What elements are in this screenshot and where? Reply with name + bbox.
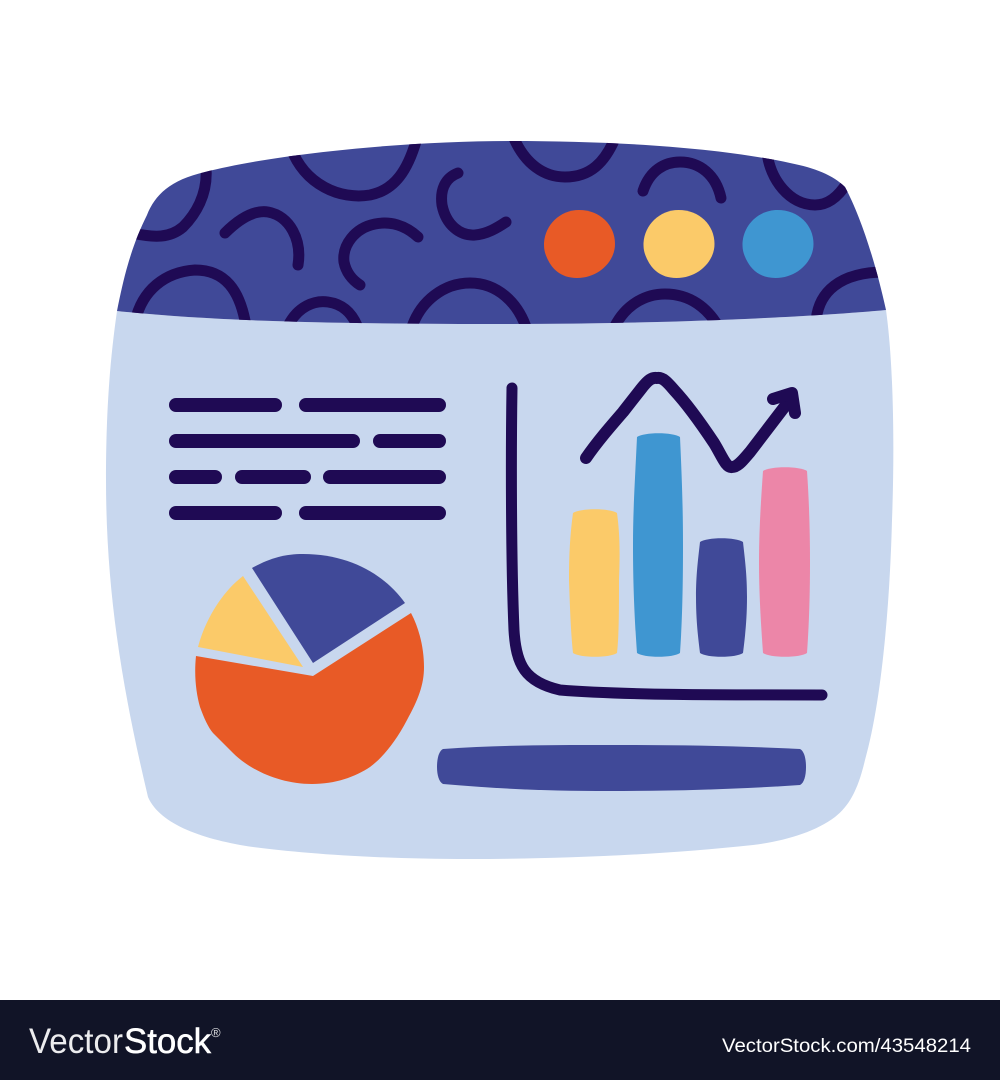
icon: blue window dot [742,210,814,278]
panel: window header [117,136,886,330]
icon: yellow window dot [644,210,714,278]
bar chart [511,378,822,695]
pie chart [195,554,424,784]
footer bar [0,1000,1000,1080]
image id text: VectorStock.com/43548214 [722,1036,971,1057]
chart axes [511,388,822,695]
bar: yellow [569,509,620,657]
pie slice: indigo [252,554,405,663]
registered mark: ® [211,1025,221,1040]
pie slice: yellow [198,576,303,667]
text block: placeholder lines [169,398,446,520]
icon: orange window dot [544,210,615,278]
pie slice: orange [195,613,424,784]
trend line arrow [586,378,795,467]
bar: indigo [696,538,747,657]
watermark logo text: Stock: Stock [124,1022,211,1061]
panel: window body [106,310,893,859]
watermark logo text: Vector: Vector [29,1022,123,1061]
header squiggle pattern [132,136,885,330]
bar: blue [633,433,683,657]
action bar [437,745,806,791]
bar: pink [759,467,810,657]
